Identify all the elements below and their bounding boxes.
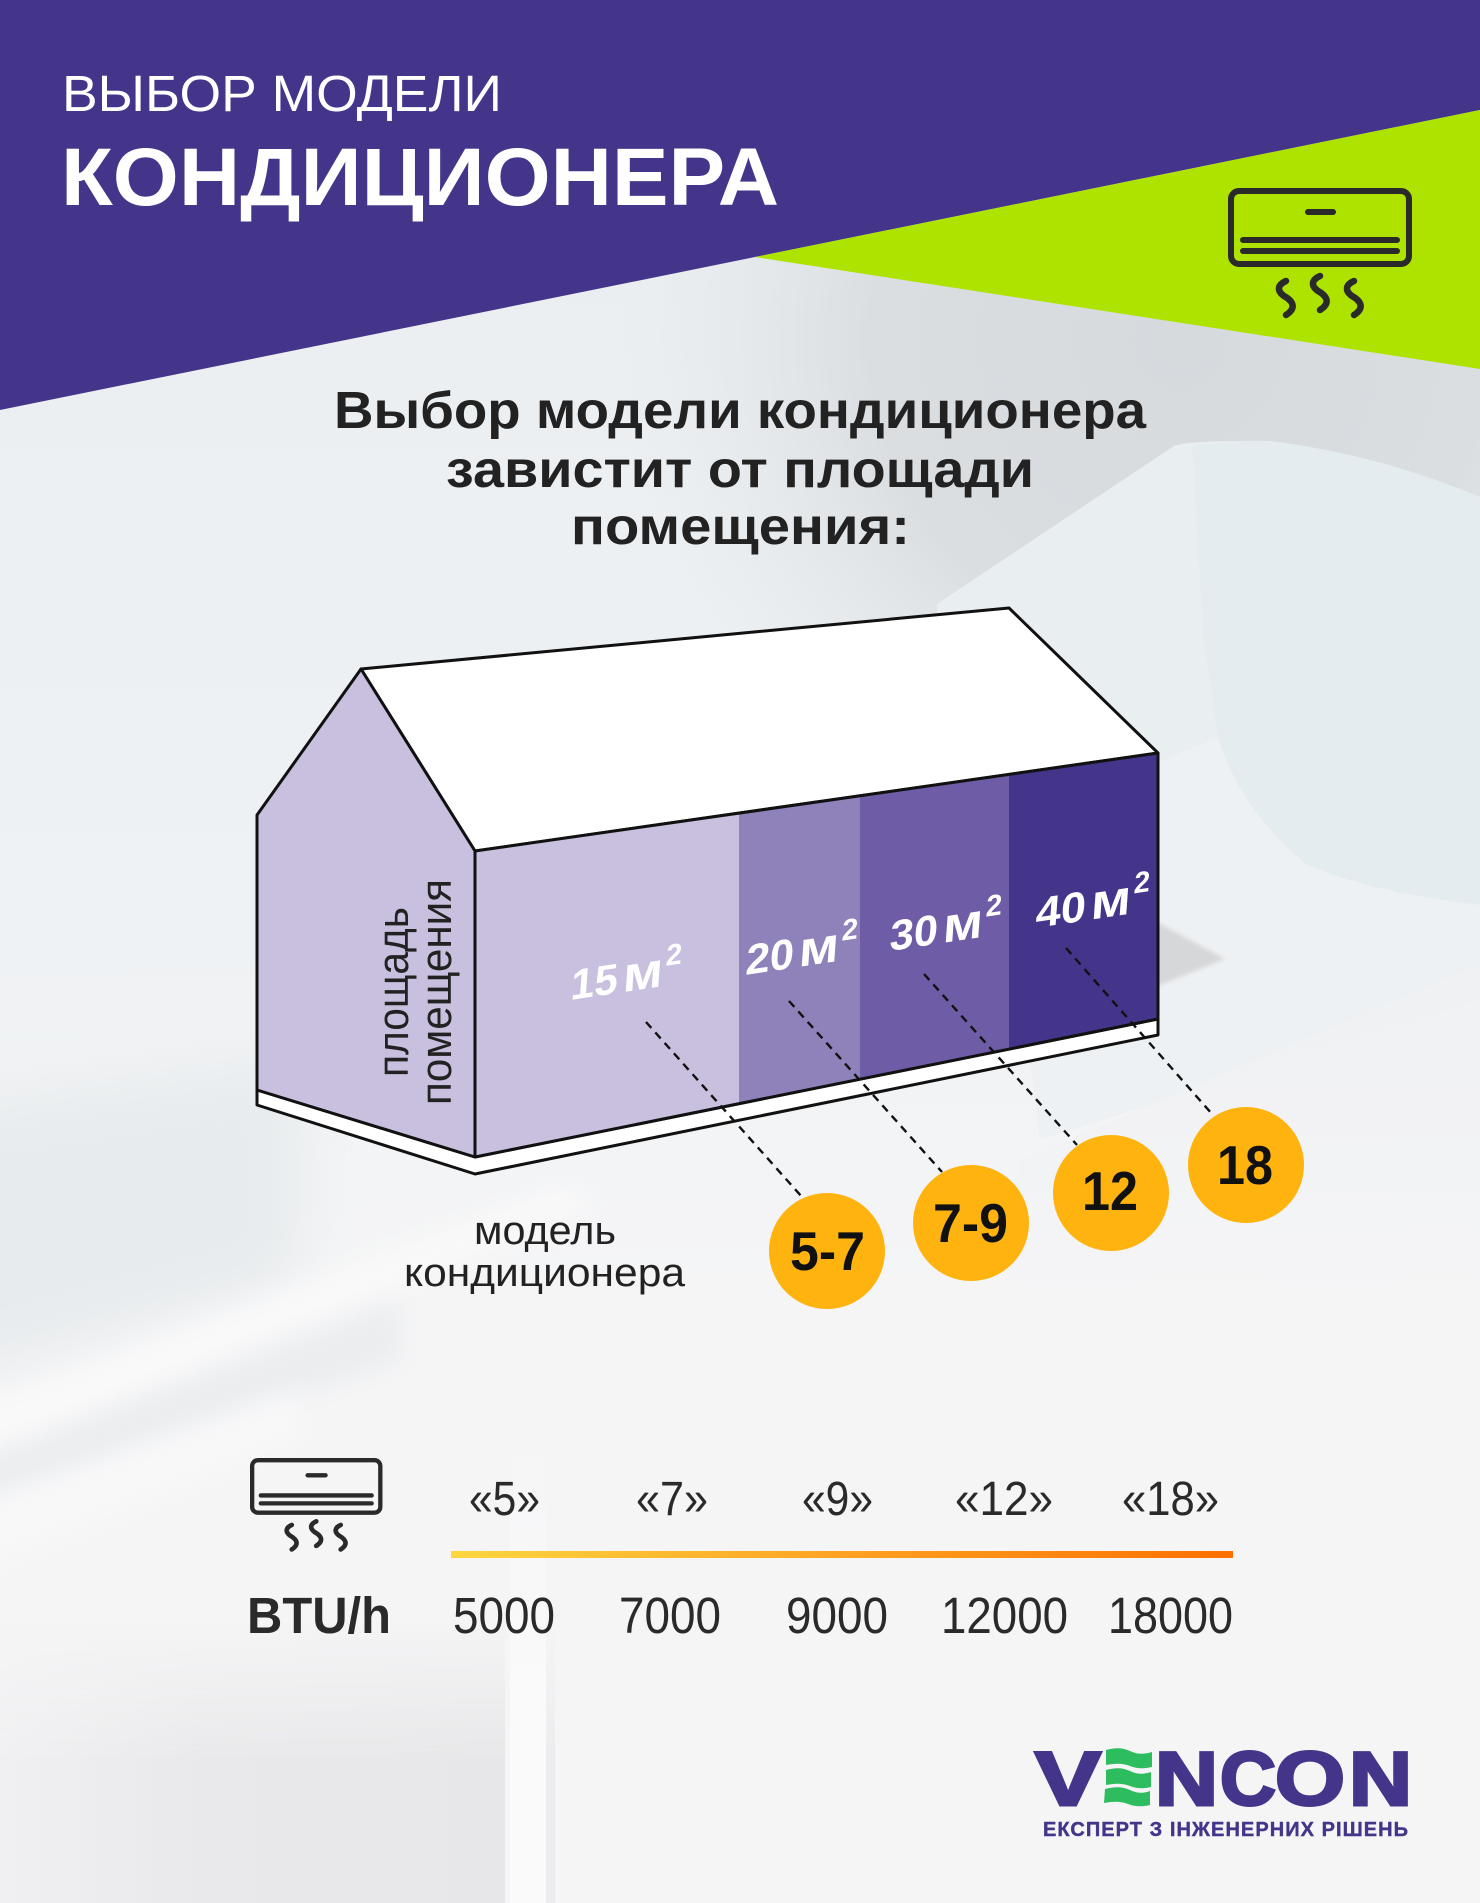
- wall segment: 40 m2: [1009, 753, 1158, 1049]
- house gable wall: [257, 669, 475, 1157]
- area label: 30 m2: 2: [985, 889, 1003, 924]
- logo: VENCON: C: [1220, 1737, 1276, 1822]
- badge: 12: [1053, 1135, 1169, 1251]
- area label: 40 m2: м: [1089, 868, 1133, 931]
- header: green triangle: [755, 110, 1480, 369]
- area label: 40 m2: 40: [1034, 883, 1088, 938]
- badge: 18: 18: [1217, 1134, 1273, 1196]
- area label: 40 m2: [1034, 865, 1151, 939]
- label: conditioner model: [404, 1209, 686, 1295]
- dashed leader lines: [646, 948, 1212, 1197]
- label: room area (vertical): [369, 879, 461, 1105]
- wall segment: 20 m2: [739, 796, 860, 1104]
- scale: BTU/h values: 5000: [453, 1587, 555, 1644]
- logo: VENCON: N: [1349, 1737, 1412, 1822]
- area label: 30 m2: [888, 889, 1003, 962]
- house base: [257, 1019, 1158, 1174]
- label: conditioner model: модель: [474, 1209, 616, 1253]
- title: КОНДИЦИОНЕРА: [61, 132, 779, 223]
- area label: 15 m2: м: [621, 941, 665, 1003]
- scale: BTU/h values: 18000: [1108, 1587, 1233, 1644]
- logo: VENCON: ЕКСПЕРТ З ІНЖЕНЕРНИХ РІШЕНЬ: [1043, 1819, 1408, 1841]
- title: ВЫБОР МОДЕЛИ: [62, 65, 502, 122]
- icon: air conditioner (scale): [252, 1460, 380, 1549]
- label: conditioner model: кондиционера: [404, 1251, 686, 1295]
- area label: 40 m2: 2: [1133, 865, 1151, 900]
- area label: 20 m2: 2: [841, 913, 859, 948]
- logo: VENCON: O: [1275, 1737, 1345, 1822]
- header: purple banner: [0, 0, 1480, 410]
- title: [61, 65, 779, 223]
- badge: 18: [1188, 1107, 1304, 1223]
- logo: VENCON: V: [1035, 1737, 1101, 1822]
- scale: model labels: «7»: [636, 1473, 708, 1526]
- scale: model labels: «9»: [802, 1473, 873, 1526]
- badge: 5-7: 5-7: [790, 1220, 865, 1282]
- area label: 20 m2: 20: [744, 930, 796, 985]
- subtitle: Выбор модели кондиционера: [334, 382, 1147, 440]
- wall segment: 15 m2: [475, 813, 739, 1157]
- label: room area (vertical): площадь: [369, 907, 418, 1077]
- wall outline: [475, 753, 1158, 1157]
- scale: BTU/h values: 7000: [619, 1587, 721, 1644]
- subtitle: завистит от площади: [446, 441, 1034, 499]
- badge: 7-9: [913, 1165, 1029, 1281]
- area label: 20 m2: м: [797, 915, 841, 978]
- scale: model labels: [469, 1473, 1219, 1526]
- subtitle: [334, 382, 1147, 556]
- area label: 15 m2: 2: [665, 938, 683, 973]
- scale: gradient bar: [451, 1551, 1233, 1558]
- area label: 15 m2: 15: [569, 955, 620, 1010]
- area label: 30 m2: м: [941, 891, 985, 954]
- area label: 20 m2: [744, 913, 859, 986]
- badge: 12: 12: [1082, 1160, 1138, 1222]
- scale: BTU/h values: 12000: [941, 1587, 1068, 1644]
- house roof: [361, 608, 1158, 851]
- scale: BTU/h values: [247, 1587, 1233, 1644]
- icon: air conditioner (header): [1231, 191, 1409, 315]
- scale: model labels: «12»: [955, 1473, 1053, 1526]
- scale: model labels: «5»: [469, 1473, 540, 1526]
- scale: BTU/h values: 9000: [786, 1587, 888, 1644]
- logo: green waves: [1104, 1748, 1152, 1806]
- badge: 7-9: 7-9: [933, 1192, 1008, 1254]
- wall segment: 30 m2: [860, 774, 1009, 1079]
- area label: 15 m2: [569, 938, 683, 1011]
- area label: 30 m2: 30: [888, 906, 940, 961]
- subtitle: помещения:: [571, 498, 910, 556]
- badge: 5-7: [769, 1193, 885, 1309]
- house diagram: [257, 608, 1158, 1174]
- scale: BTU/h values: BTU/h: [247, 1587, 391, 1644]
- logo: VENCON: N: [1155, 1737, 1218, 1822]
- scale: model labels: «18»: [1122, 1473, 1219, 1526]
- logo: VENCON: [1035, 1737, 1412, 1841]
- label: room area (vertical): помещения: [412, 879, 461, 1105]
